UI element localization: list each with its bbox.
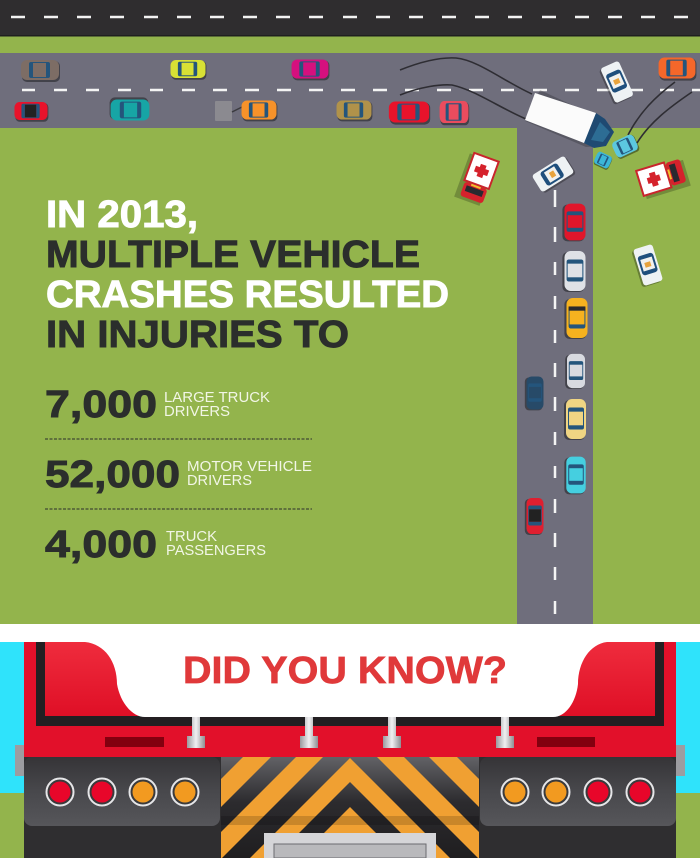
car: teal (110, 97, 149, 120)
car: gold (337, 100, 372, 121)
did you know banner (0, 624, 700, 717)
stat: motor vehicle drivers (45, 454, 312, 496)
towed trailer (215, 101, 242, 121)
ambulances (454, 151, 691, 207)
car: red convertible (14, 102, 48, 122)
heading: MULTIPLE VEHICLE (46, 234, 420, 276)
cyan car (611, 133, 641, 160)
cars on horizontal road (14, 58, 696, 125)
crashed cyan cars (592, 133, 641, 171)
heading: IN INJURIES TO (46, 314, 349, 356)
small cyan car (592, 151, 613, 171)
tail lights left (46, 778, 198, 806)
car: grey brown (21, 60, 60, 82)
licence plate (264, 833, 436, 858)
stat: motor vehicle drivers: MOTOR VEHICLE (187, 459, 312, 475)
stat: large truck drivers (45, 384, 270, 426)
stat: motor vehicle drivers: 52,000 (45, 454, 180, 496)
vertical grey road (517, 128, 593, 624)
truck rear (0, 642, 700, 858)
stat: large truck drivers: 7,000 (45, 384, 157, 426)
car: red lower (525, 498, 544, 535)
car: navy (525, 376, 544, 410)
left and right light panels (24, 757, 220, 826)
mounting bolts (187, 717, 514, 748)
window frame (36, 642, 664, 726)
stat: truck passengers: TRUCK (166, 529, 217, 545)
car: red (562, 204, 586, 241)
stat: large truck drivers: DRIVERS (164, 404, 230, 420)
tail lights right (502, 778, 654, 806)
car: white grey (562, 251, 586, 292)
stat: large truck drivers: LARGE TRUCK (164, 390, 270, 406)
crashed truck (525, 90, 614, 148)
hazard chevrons (221, 757, 479, 858)
car: lime (171, 60, 206, 80)
grille slots (105, 737, 595, 747)
cars on vertical road (525, 204, 588, 535)
red body (24, 642, 676, 757)
heading: CRASHES RESULTED (46, 274, 449, 316)
stat: truck passengers: 4,000 (45, 524, 157, 566)
heading: IN 2013, (46, 194, 198, 236)
car: yellow (564, 298, 588, 339)
police car: top right (598, 61, 634, 105)
sky sides (0, 642, 700, 793)
lower black panel (24, 757, 676, 858)
ambulance: left (454, 151, 500, 207)
stat: truck passengers (45, 524, 266, 566)
top dark road (0, 0, 700, 36)
police car: on grass (631, 244, 663, 288)
car: cyan (564, 457, 586, 494)
stat: motor vehicle drivers: DRIVERS (187, 473, 252, 489)
car: orange top right (659, 58, 696, 81)
skid marks (400, 58, 692, 143)
stat: truck passengers: PASSENGERS (166, 543, 266, 559)
horizontal grey road (0, 53, 700, 128)
mirror arms (15, 745, 685, 776)
police cars (532, 61, 663, 288)
car: orange (242, 100, 277, 121)
ambulance: right (635, 156, 691, 200)
car: pink (440, 101, 469, 125)
car: red (389, 102, 430, 125)
heading (46, 194, 449, 356)
police car: junction (532, 155, 576, 194)
did you know banner: DID YOU KNOW? (183, 650, 507, 692)
car: silver (565, 354, 585, 389)
car: cream (564, 399, 586, 440)
car: magenta (292, 60, 329, 80)
